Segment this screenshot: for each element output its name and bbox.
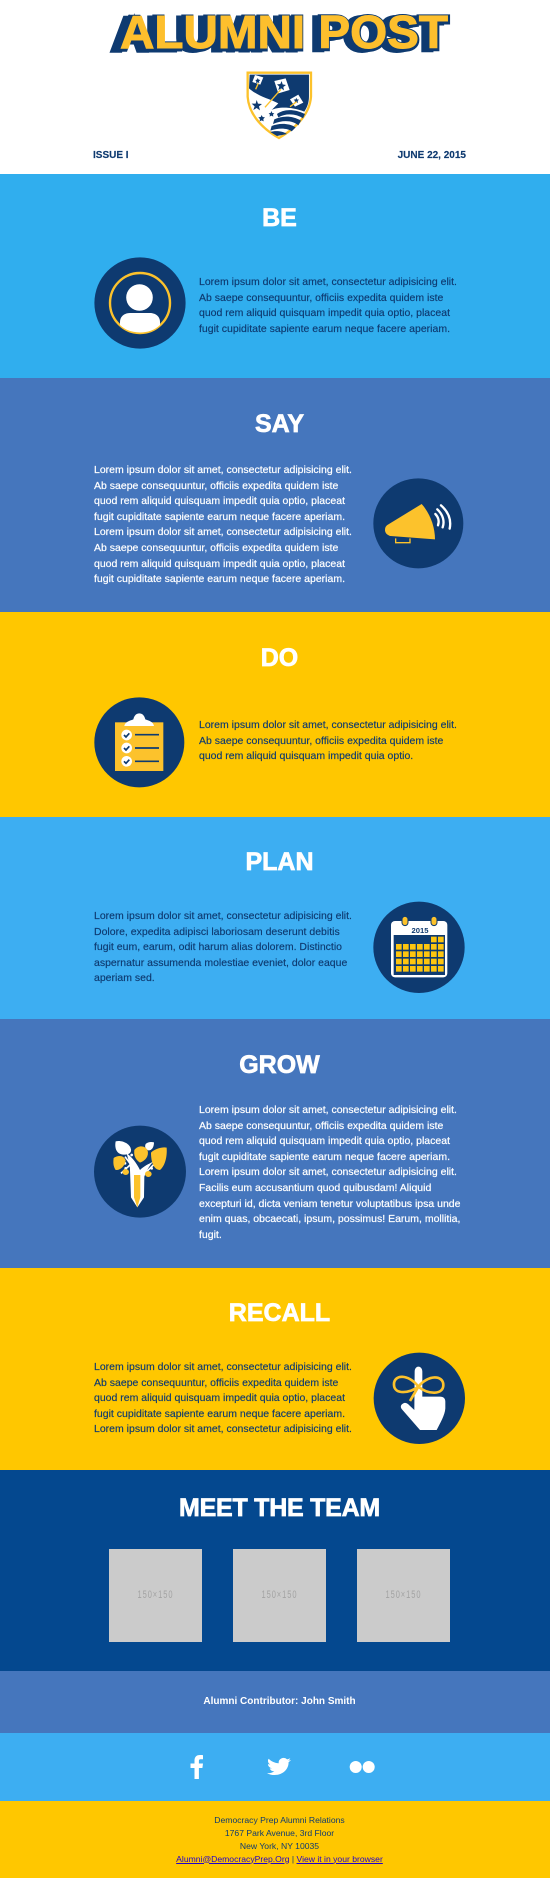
text: be body: Lorem ipsum dolor sit amet, consectetur adipisicing elit. — [199, 276, 457, 288]
text: recall body: fugit cupiditate sapiente earum neque facere aperiam. — [94, 1408, 345, 1420]
panel: be background — [0, 174, 550, 378]
icon: twitter — [267, 1758, 291, 1775]
image placeholder 2 — [233, 1549, 326, 1642]
text: say body — [94, 464, 352, 585]
text: do body: quod rem aliquid quisquam impedit quia optio. — [199, 750, 413, 762]
panel: grow background — [0, 1019, 550, 1268]
masthead logo: Alumni Post: ALUMNI POST — [112, 8, 442, 60]
text: be body: quod rem aliquid quisquam impedit quia optio, placeat — [199, 307, 450, 319]
text: grow body: Lorem ipsum dolor sit amet, consectetur adipisicing elit. — [199, 1166, 457, 1178]
text: say body: Ab saepe consequuntur, officiis expedita quidem iste — [94, 480, 338, 492]
text: recall body: quod rem aliquid quisquam impedit quia optio, placeat — [94, 1392, 345, 1404]
heading: grow: GROW — [239, 1051, 320, 1079]
text: grow body: quod rem aliquid quisquam impedit quia optio, placeat — [199, 1135, 450, 1147]
panel: footer background — [0, 1801, 550, 1878]
text: recall body: Ab saepe consequuntur, officiis expedita quidem iste — [94, 1377, 338, 1389]
footer text: New York, NY 10035 — [240, 1840, 319, 1850]
footer text — [176, 1814, 383, 1864]
text: plan body: aspernatur assumenda molestiae eveniet, dolor eaque — [94, 957, 347, 969]
text: say body: quod rem aliquid quisquam impedit quia optio, placeat — [94, 558, 345, 570]
text: grow body: Facilis eum accusantium quod quibusdam! Aliquid — [199, 1182, 431, 1194]
text: grow body: Lorem ipsum dolor sit amet, consectetur adipisicing elit. — [199, 1104, 457, 1116]
text: plan body: fugit eum, earum, odit harum alias dolorem. Distinctio — [94, 941, 342, 953]
image placeholder 3: 150×150 — [386, 1589, 421, 1601]
text: say body: quod rem aliquid quisquam impedit quia optio, placeat — [94, 495, 345, 507]
image placeholder 1 — [109, 1549, 202, 1642]
image placeholder 2: 150×150 — [262, 1589, 297, 1601]
icon: calendar: 2015 — [411, 926, 429, 935]
panel: team background — [0, 1470, 550, 1671]
text: recall body — [94, 1361, 352, 1435]
issue date: JUNE 22, 2015 — [398, 150, 466, 161]
heading: be: BE — [262, 204, 297, 232]
text: grow body: enim quas, obcaecati, ipsum, possimus! Earum, mollitia, — [199, 1213, 460, 1225]
panel: say background — [0, 378, 550, 612]
text: recall body: Lorem ipsum dolor sit amet, consectetur adipisicing elit. — [94, 1361, 352, 1373]
footer text: Alumni@DemocracyPrep.Org | View it in your browser — [176, 1854, 383, 1864]
heading: meet the team: MEET THE TEAM — [179, 1494, 380, 1522]
text: be body — [199, 276, 457, 335]
panel: plan background — [0, 817, 550, 1019]
text: plan body: aperiam sed. — [94, 972, 155, 984]
issue label: ISSUE I — [93, 150, 129, 161]
masthead logo: Alumni Post: ALUMNI POST — [120, 6, 448, 58]
text: grow body — [198, 1104, 460, 1241]
text: contributor: Alumni Contributor: John Smith — [203, 1696, 356, 1707]
text: plan body: Lorem ipsum dolor sit amet, consectetur adipisicing elit. — [94, 910, 352, 922]
text: do body — [199, 719, 457, 762]
text: be body: Ab saepe consequuntur, officiis expedita quidem iste — [199, 292, 443, 304]
panel: recall background — [0, 1268, 550, 1470]
text: plan body — [94, 910, 352, 984]
heading: recall: RECALL — [229, 1299, 330, 1327]
text: say body: Lorem ipsum dolor sit amet, consectetur adipisicing elit. — [94, 526, 352, 538]
icon: calendar — [373, 902, 465, 993]
footer text: 1767 Park Avenue, 3rd Floor — [225, 1828, 334, 1838]
text: grow body: fugit. — [199, 1229, 222, 1241]
image placeholder 3 — [357, 1549, 450, 1642]
footer text: Democracy Prep Alumni Relations — [214, 1814, 345, 1824]
panel: do background — [0, 612, 550, 817]
icon: finger with string — [374, 1352, 465, 1444]
panel: contributor background — [0, 1671, 550, 1733]
heading: do: DO — [261, 644, 298, 672]
masthead logo: Alumni Post: ALUMNI POST — [117, 7, 448, 59]
text: be body: fugit cupiditate sapiente earum neque facere aperiam. — [199, 323, 450, 335]
text: do body: Ab saepe consequuntur, officiis expedita quidem iste — [199, 735, 443, 747]
text: do body: Lorem ipsum dolor sit amet, consectetur adipisicing elit. — [199, 719, 457, 731]
heading: say: SAY — [255, 410, 304, 438]
text: plan body: Dolore, expedita adipisci laboriosam deserunt debitis — [94, 926, 340, 938]
text: say body: Lorem ipsum dolor sit amet, consectetur adipisicing elit. — [94, 464, 352, 476]
text: recall body: Lorem ipsum dolor sit amet, consectetur adipisicing elit. — [94, 1423, 352, 1435]
text: grow body: fugit cupiditate sapiente earum neque facere aperiam. — [199, 1151, 450, 1163]
text: say body: fugit cupiditate sapiente earum neque facere aperiam. — [94, 511, 345, 523]
text: grow body: excepturi id, dicta veniam tenetur voluptatibus ipsa unde — [199, 1198, 460, 1210]
icon: person — [94, 257, 186, 349]
text: say body: fugit cupiditate sapiente earum neque facere aperiam. — [94, 573, 345, 585]
icon: crest shield — [246, 72, 312, 140]
icon: megaphone — [373, 478, 464, 568]
image placeholder 1: 150×150 — [138, 1589, 173, 1601]
text: grow body: Ab saepe consequuntur, officiis expedita quidem iste — [199, 1120, 443, 1132]
icon: pencil tree — [94, 1126, 186, 1218]
panel: social background — [0, 1733, 550, 1801]
text: say body: Ab saepe consequuntur, officiis expedita quidem iste — [94, 542, 338, 554]
icon: clipboard — [94, 697, 184, 788]
heading: plan: PLAN — [245, 848, 314, 876]
